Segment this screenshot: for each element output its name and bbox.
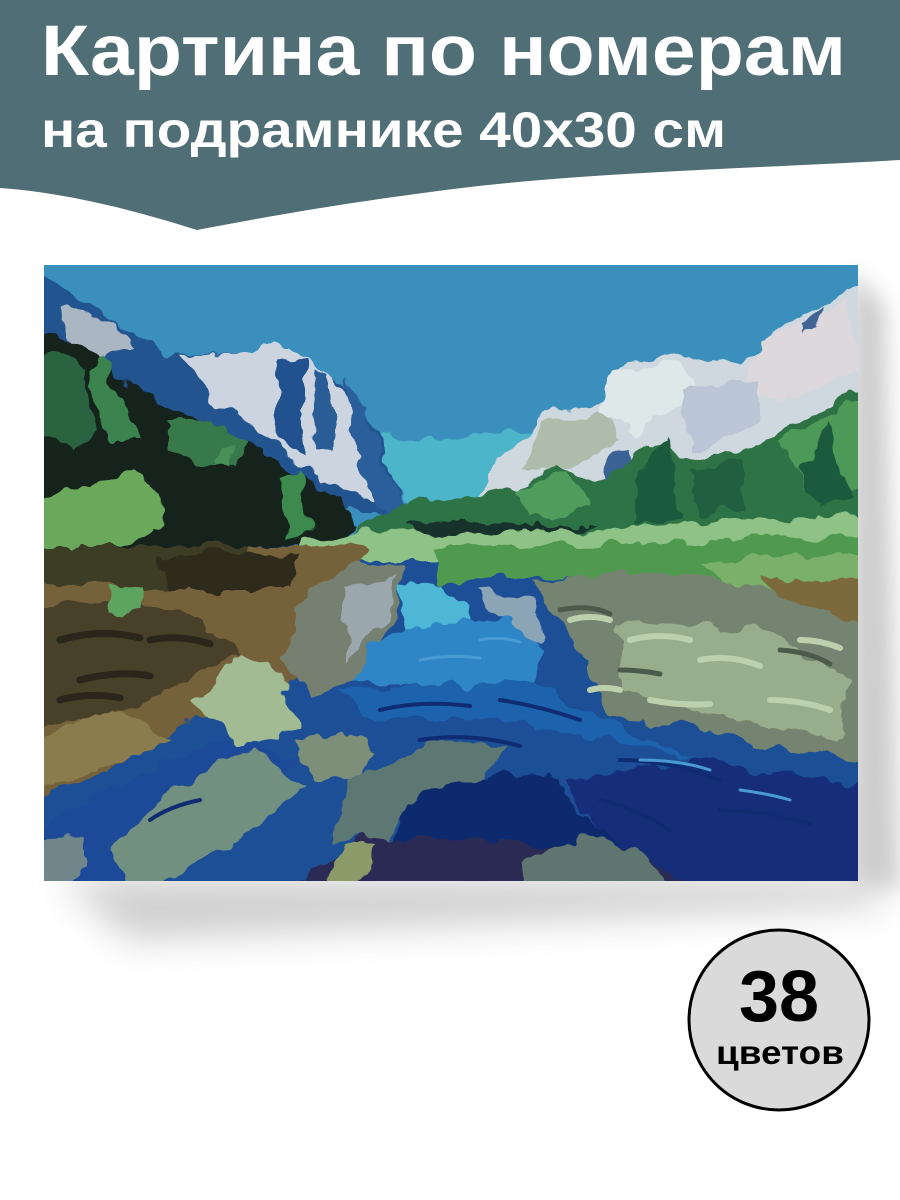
water ripples and speckles	[60, 608, 840, 830]
header banner	[0, 0, 900, 230]
left dark forest	[30, 330, 355, 558]
canvas shadow	[60, 270, 900, 940]
foreground rocks	[30, 728, 505, 890]
left reflection brown	[30, 546, 370, 800]
badge: 38 colours	[689, 930, 869, 1110]
reflected pale tree patch	[195, 650, 300, 745]
central sky reflection	[340, 580, 700, 760]
subtitle: на подрамнике 40х30 см	[41, 102, 726, 158]
pale horizon sky	[380, 428, 533, 504]
far shore meadow	[300, 515, 870, 562]
dark purple bottom rocks	[300, 832, 684, 881]
far right treeline	[350, 385, 870, 535]
number 38: 38	[739, 957, 819, 1037]
right reflection green	[434, 533, 858, 587]
title: Картина по номерам	[41, 12, 846, 91]
painting: mountain lake	[30, 265, 870, 890]
sky	[44, 265, 858, 565]
reflected left mountain	[280, 565, 405, 700]
deep blue foreground	[566, 757, 858, 881]
water base	[30, 540, 870, 890]
right mountain	[480, 280, 870, 500]
label: colours: цветов	[716, 1034, 844, 1071]
left mountain	[30, 265, 408, 515]
